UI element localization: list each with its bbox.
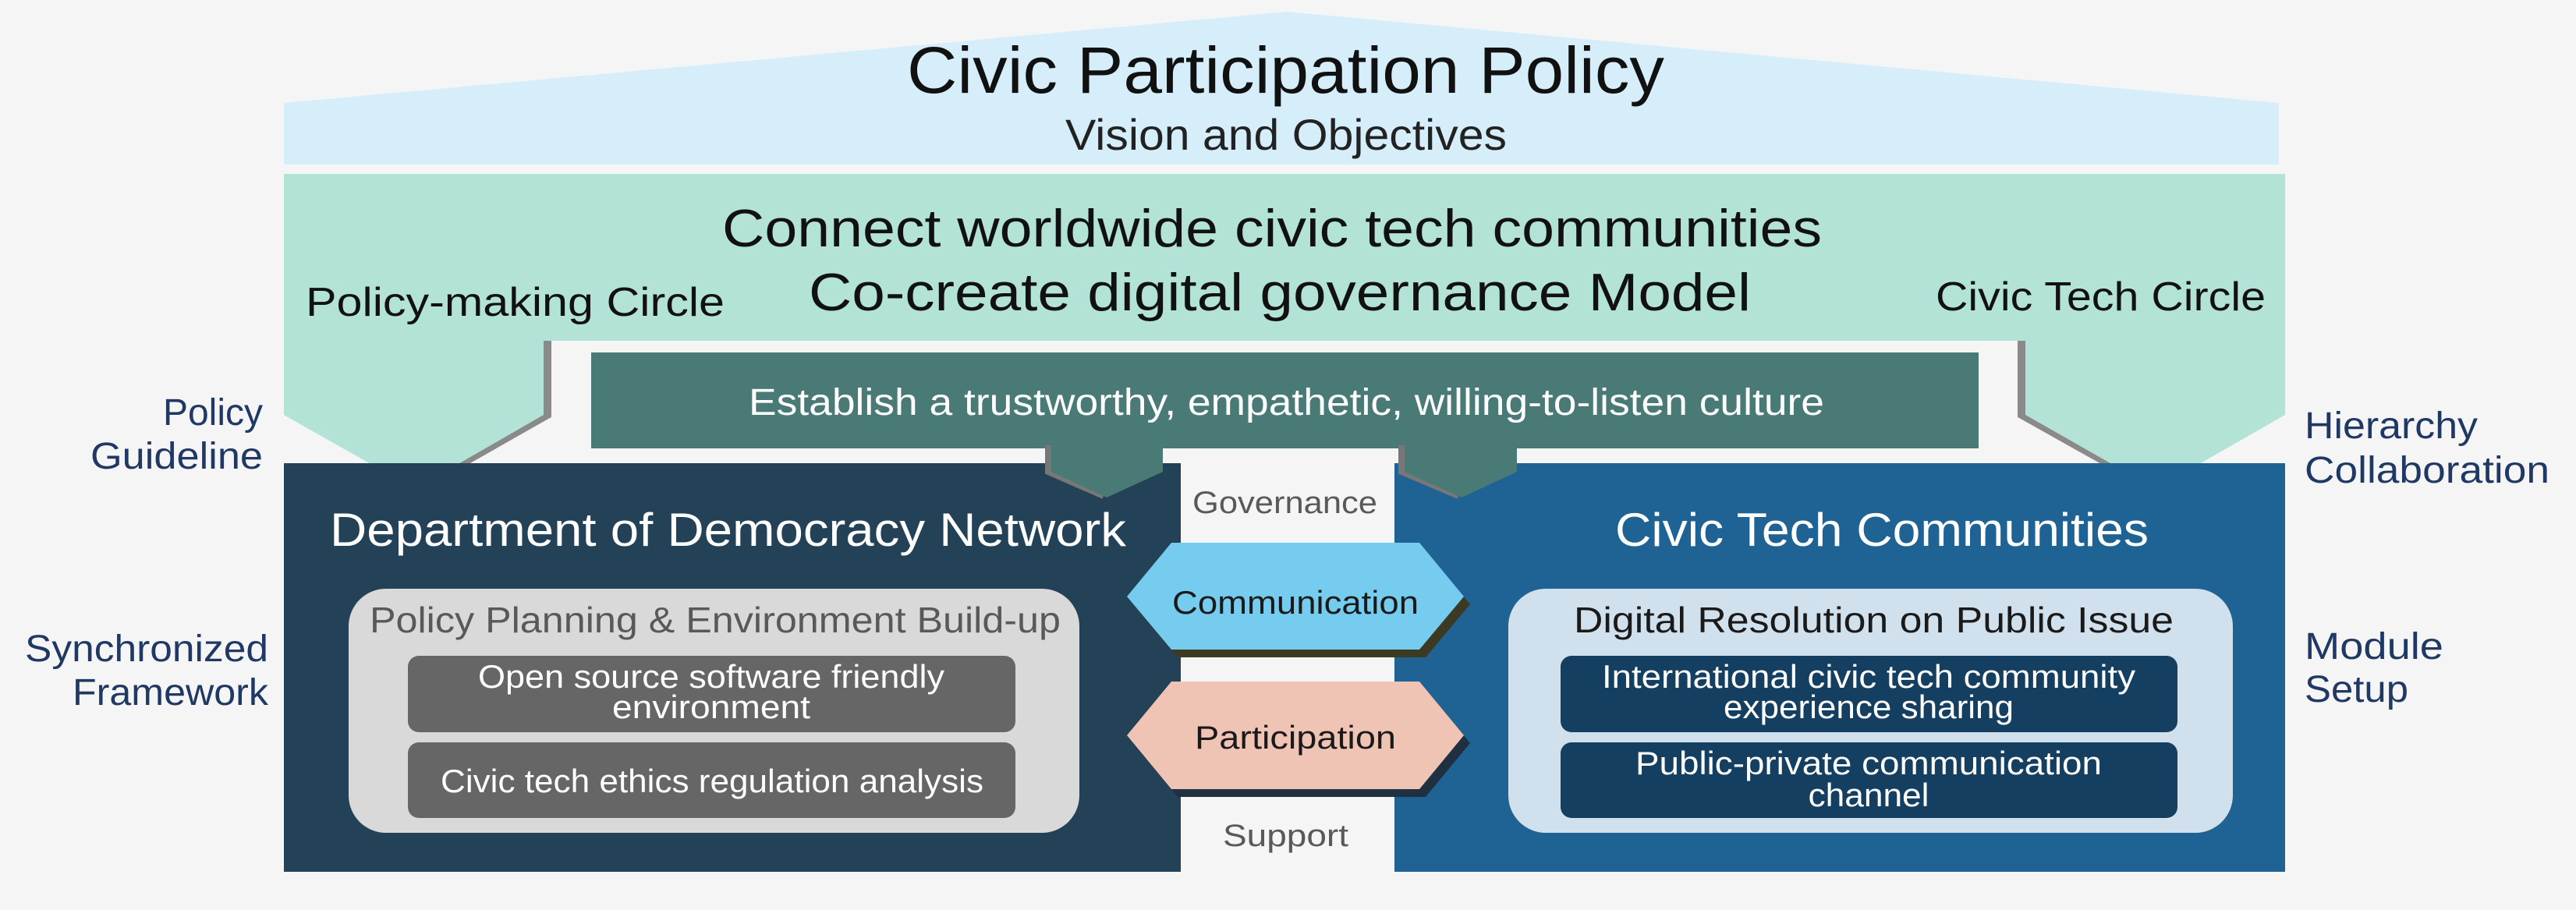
right panel: civic tech communities [1394, 463, 2285, 872]
side label: synchronized framework [25, 629, 269, 713]
side label: hierarchy collaboration: Collaboration [2305, 450, 2549, 491]
hexagon: communication [1127, 543, 1470, 657]
inner box: digital resolution: Digital Resolution on Public Issue [1574, 600, 2174, 640]
side label: hierarchy collaboration [2305, 405, 2549, 491]
subtitle: Vision and Objectives [1065, 110, 1507, 159]
green band: objectives [284, 174, 2285, 489]
hexagon: communication: Communication [1172, 584, 1419, 621]
hexagon: participation [1127, 682, 1470, 797]
left panel: department of democracy network: Department of Democracy Network [330, 504, 1127, 556]
inner box: policy planning [349, 589, 1079, 833]
teal band: culture [591, 352, 1979, 448]
inner box: digital resolution: channel [1808, 777, 1929, 813]
label: support: Support [1223, 819, 1348, 853]
title: Civic Participation Policy [907, 34, 1664, 107]
teal band: culture: Establish a trustworthy, empathetic, willing-to-listen culture [749, 382, 1824, 423]
right panel: civic tech communities: Civic Tech Communities [1615, 504, 2149, 556]
small arrows from culture band [1048, 445, 1517, 497]
side label: hierarchy collaboration: Hierarchy [2305, 405, 2478, 447]
hexagon: participation: Participation [1195, 719, 1396, 756]
side label: policy guideline [90, 392, 263, 477]
side label: policy guideline: Guideline [90, 436, 263, 477]
label: governance: Governance [1192, 486, 1377, 520]
inner box: digital resolution: Public-private communication [1635, 745, 2102, 781]
inner box: digital resolution: International civic tech community [1602, 658, 2135, 695]
side label: module setup: Setup [2305, 669, 2408, 710]
left panel: department of democracy network [284, 463, 1181, 872]
objective text: Connect worldwide civic tech communities [722, 199, 1822, 258]
inner box: digital resolution [1508, 589, 2233, 833]
inner box: policy planning: environment [612, 689, 810, 725]
circle labels: Policy-making Circle [306, 280, 725, 325]
left arrow: policy-making circle [284, 341, 551, 489]
inner box: policy planning: Policy Planning & Environment Build-up [370, 600, 1061, 640]
side label: synchronized framework: Synchronized [25, 629, 268, 670]
green band: objectives: Co-create digital governance Model [809, 263, 1751, 322]
side label: policy guideline: Policy [163, 392, 263, 434]
side label: synchronized framework: Framework [73, 672, 269, 713]
green band: objectives: Civic Tech Circle [1936, 274, 2266, 320]
side label: module setup [2305, 626, 2443, 710]
roof: vision [284, 12, 2279, 165]
inner box: policy planning: Civic tech ethics regulation analysis [441, 763, 983, 799]
side label: module setup: Module [2305, 626, 2443, 667]
inner box: policy planning: Open source software friendly [478, 658, 944, 695]
inner box: digital resolution: experience sharing [1724, 689, 2014, 725]
right arrow: civic tech circle [2021, 341, 2149, 487]
